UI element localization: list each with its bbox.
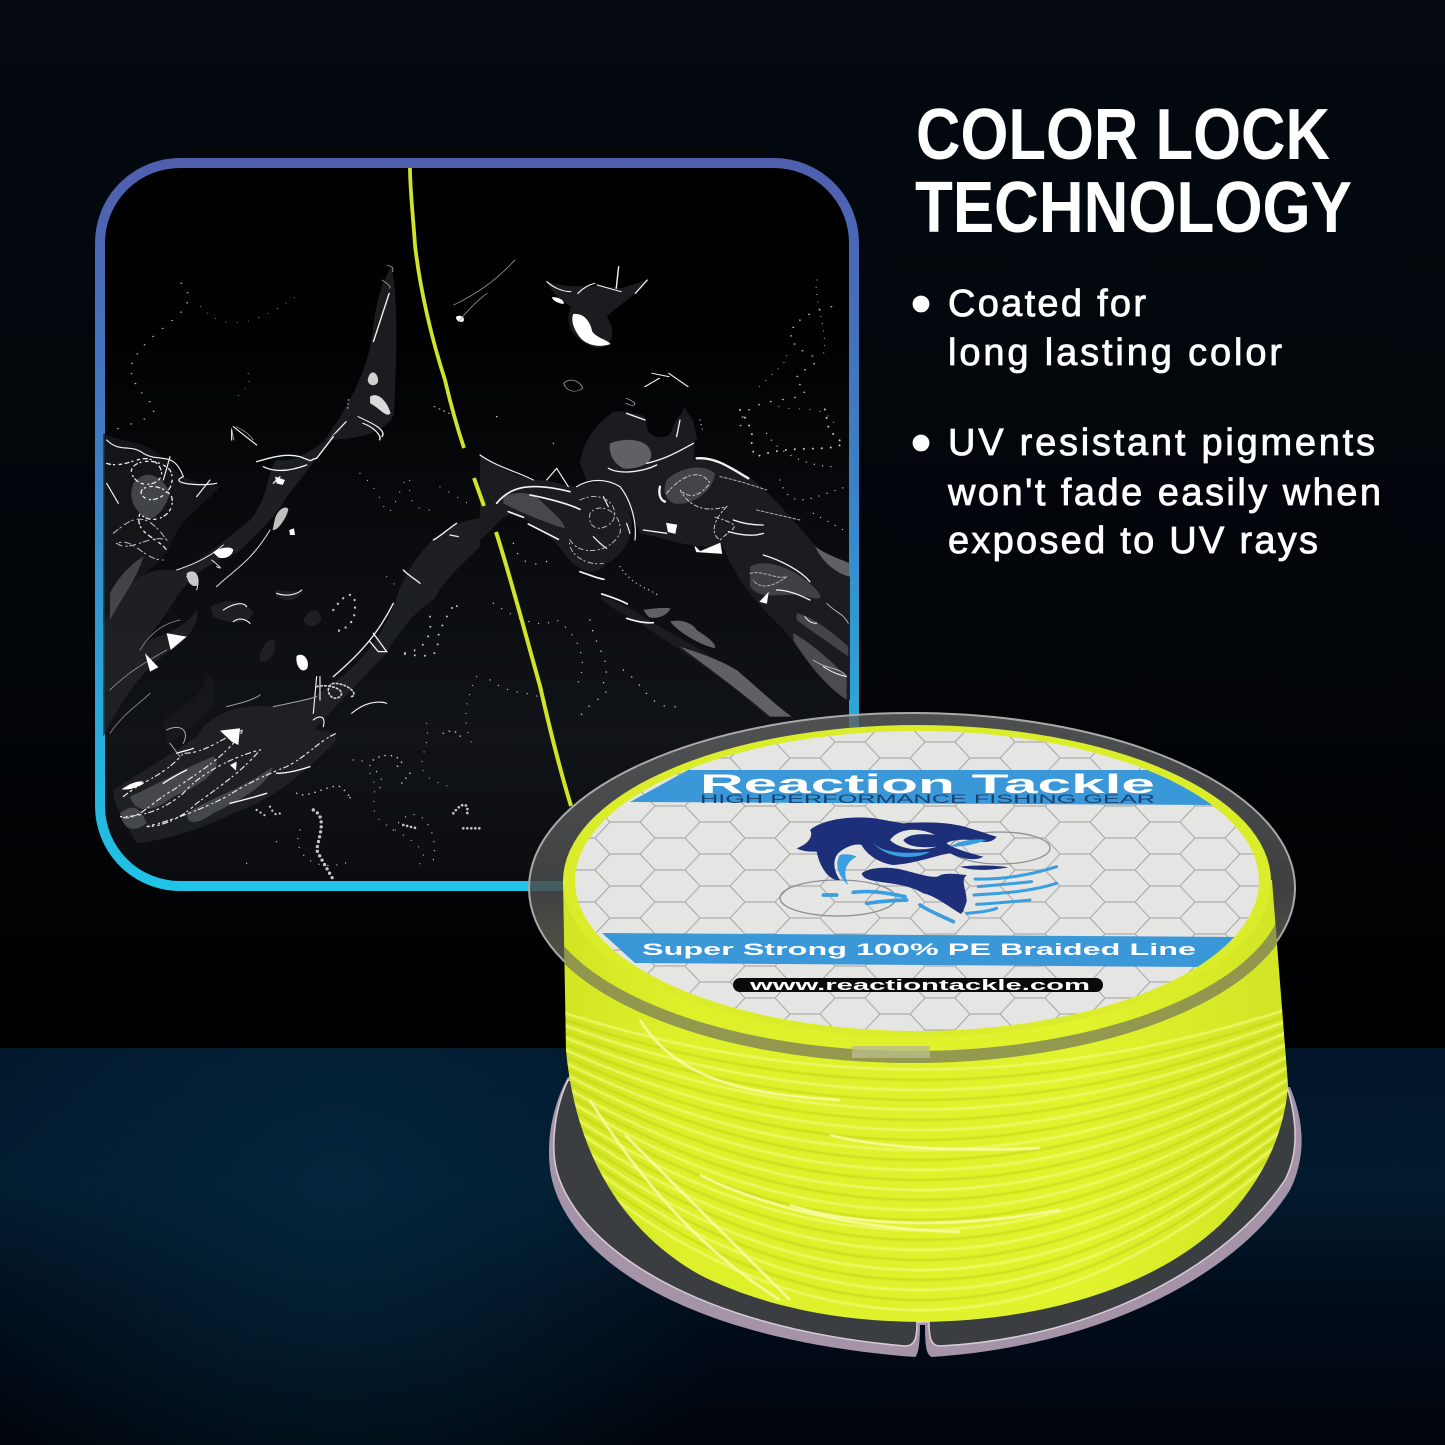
bullet: coated: Coated for <box>948 283 1146 325</box>
bullet: coated <box>913 283 1282 374</box>
right droplets <box>490 407 847 717</box>
bullet: UV resistant <box>913 422 1381 562</box>
band text: Super Strong 100% PE Braided Line <box>642 940 1196 959</box>
bullet list <box>913 283 1381 562</box>
yellow fishing line above water <box>410 168 464 448</box>
left water ribbons <box>103 423 480 843</box>
spool <box>529 700 1320 1357</box>
www pill <box>733 978 1103 992</box>
bottom flange <box>549 1077 1302 1357</box>
bottom blue band <box>602 933 1239 967</box>
tangled right reflections <box>570 475 848 677</box>
yellow rim <box>563 725 1271 1037</box>
top droplets <box>110 280 836 433</box>
dark background <box>0 0 1445 1048</box>
title: COLOR LOCK <box>916 95 1330 175</box>
left droplets <box>247 473 480 880</box>
lower mass greys <box>110 475 273 829</box>
top blue band <box>630 770 1216 805</box>
title <box>915 95 1352 248</box>
flange front lip <box>564 924 1277 1063</box>
wound yellow line <box>563 880 1288 1322</box>
ellipses behind fish <box>780 832 1050 916</box>
website text: www.reactiontackle.com <box>748 977 1090 994</box>
bullet: UV resistant: UV resistant pigments <box>948 422 1375 464</box>
bullet: coated: long lasting color <box>948 332 1282 374</box>
floor band <box>0 1048 1445 1445</box>
right splash details <box>480 407 850 717</box>
grey water reflections <box>503 440 849 717</box>
bullet: UV resistant: won't fade easily when <box>947 472 1381 514</box>
scribbled left highlights <box>107 427 458 827</box>
water splash <box>103 168 850 880</box>
panel: water splash photo <box>100 163 854 886</box>
left splash details <box>103 423 480 880</box>
left white blobs <box>122 477 308 790</box>
label disc <box>575 731 1259 1031</box>
right highlights <box>480 413 847 677</box>
right water bodies <box>480 407 850 717</box>
bullet: UV resistant: exposed to UV rays <box>948 520 1318 562</box>
yellow fishing line below water <box>474 478 571 806</box>
upper splash details <box>110 260 836 440</box>
brand text: Reaction Tackle <box>700 769 1155 799</box>
title: TECHNOLOGY <box>915 168 1352 248</box>
top flange clear disc <box>529 713 1295 1063</box>
tagline text: HIGH PERFORMANCE FISHING GEAR <box>700 792 1156 806</box>
fish logo <box>797 818 1057 922</box>
